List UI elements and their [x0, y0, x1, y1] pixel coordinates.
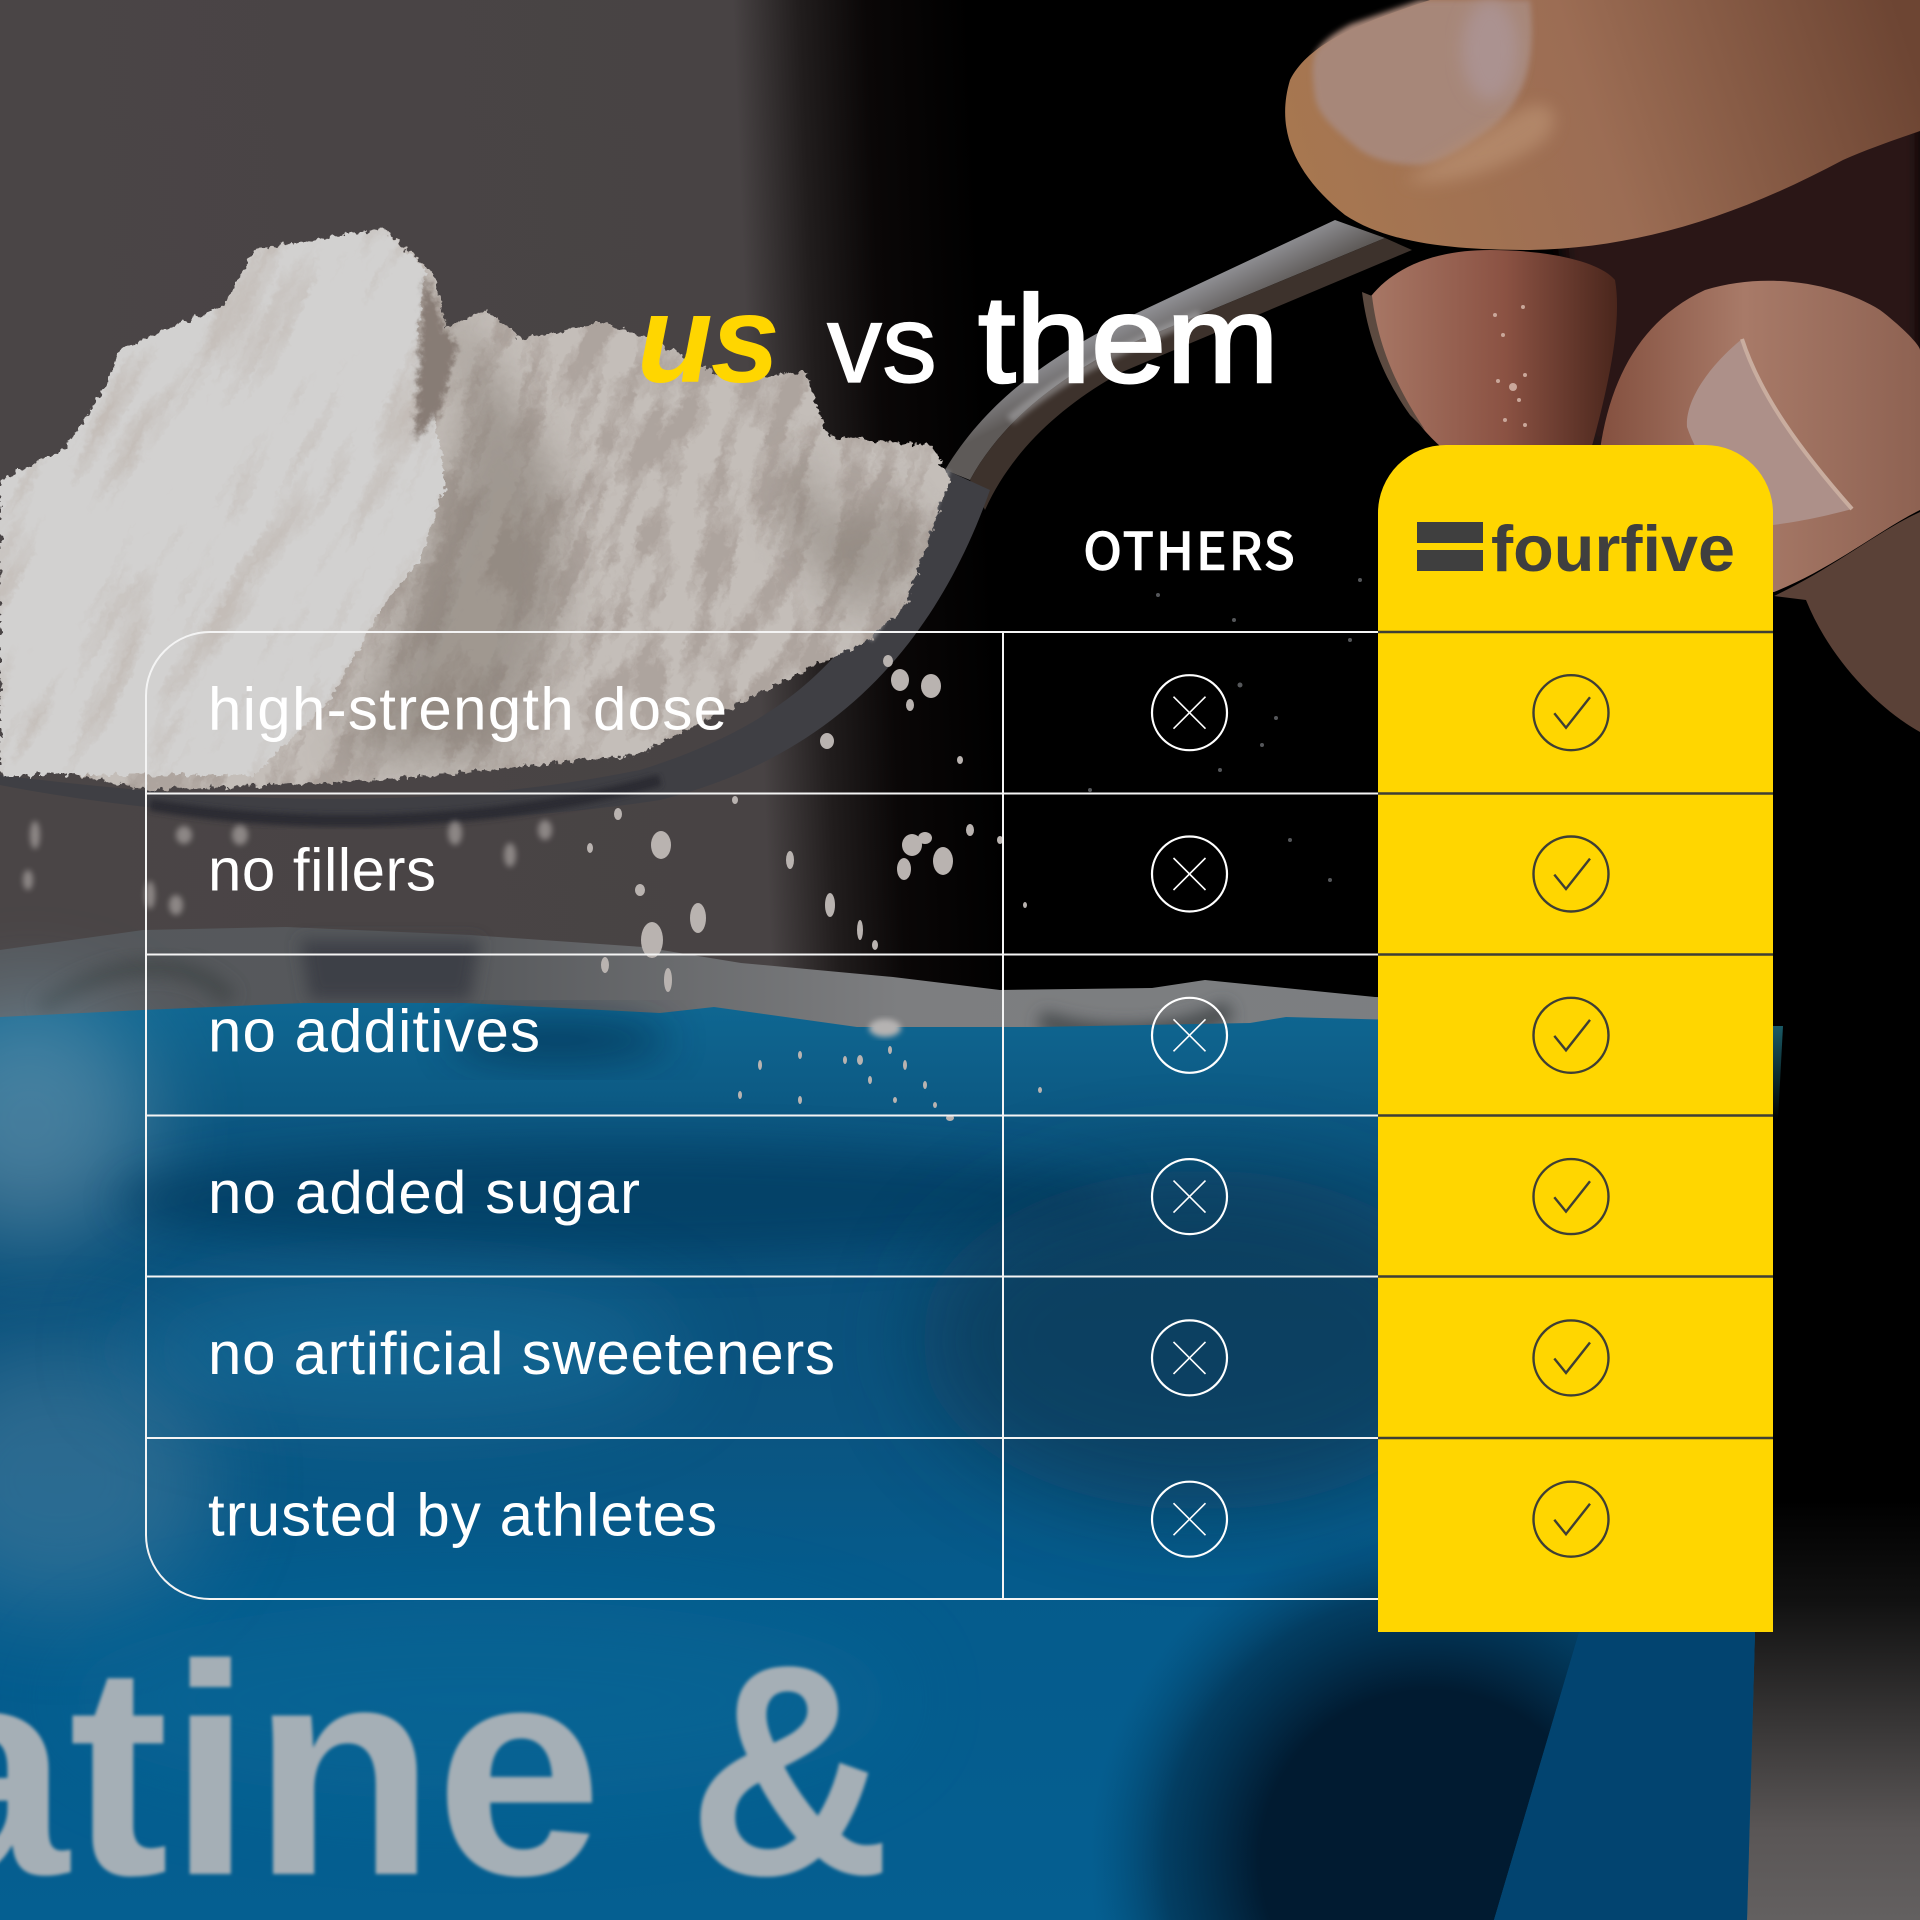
cross icon row 3	[1152, 998, 1227, 1073]
logo: fourfive: fourfive	[1491, 512, 1735, 585]
title word: them: them	[978, 271, 1279, 409]
label: no fillers: no fillers	[208, 836, 436, 904]
title	[637, 271, 1279, 409]
shaded cliff beside peak	[415, 275, 458, 440]
blue pouch	[0, 927, 1783, 1920]
thumb	[1285, 0, 1920, 250]
label: no artificial sweeteners: no artificial sweeteners	[208, 1320, 835, 1387]
hand holding spoon	[1285, 0, 1920, 732]
header: others: OTHERS	[1083, 510, 1295, 585]
check icon row 3	[1534, 998, 1608, 1073]
pouch body	[0, 1003, 1770, 1920]
powder heap on spoon	[0, 0, 1607, 1273]
check icon row 2	[1534, 836, 1608, 912]
spoon handle	[945, 220, 1412, 510]
check icon row 4	[1534, 1159, 1608, 1234]
pouch edge fading to black	[1770, 1026, 1783, 1120]
comparison table	[146, 445, 1773, 1632]
powder specks on finger	[1493, 305, 1527, 427]
ring finger with nail	[1600, 281, 1920, 592]
cross icon row 1	[1152, 675, 1227, 750]
fine dust on dark background	[1088, 578, 1362, 882]
powder body	[0, 228, 951, 792]
check icon row 5	[1534, 1320, 1608, 1395]
check icon row 6	[1534, 1482, 1608, 1557]
falling powder particles	[23, 655, 1042, 1121]
title word: us: us	[637, 271, 778, 409]
yellow column divider lines	[1378, 632, 1773, 1438]
label: no additives: no additives	[208, 998, 540, 1064]
label: trusted by athletes: trusted by athletes	[208, 1482, 717, 1548]
others column cross icons	[1152, 675, 1227, 1557]
silver pouch rim	[0, 927, 1500, 1060]
cross icon row 4	[1152, 1159, 1227, 1234]
cross icon row 6	[1152, 1482, 1227, 1557]
cross icon row 2	[1152, 836, 1227, 912]
fourfive column check icons	[1534, 675, 1608, 1557]
thumb nail	[1313, 0, 1532, 165]
powder burst on pouch rim	[869, 1019, 901, 1037]
label: high-strength dose: high-strength dose	[208, 676, 727, 742]
label: no added sugar: no added sugar	[208, 1159, 640, 1226]
pouch printed text	[0, 1602, 891, 1920]
check icon row 1	[1534, 675, 1608, 750]
row labels	[208, 676, 835, 1548]
lower right grey corner	[1700, 1500, 1920, 1920]
shadow between fingers	[1560, 100, 1920, 470]
lower palm	[1774, 512, 1920, 732]
pouch shading	[0, 1000, 1755, 1920]
yellow fourfive column	[1378, 445, 1773, 1632]
title word: vs: vs	[827, 283, 937, 406]
cross icon row 5	[1152, 1320, 1227, 1395]
spoon bowl rim	[0, 465, 990, 820]
dark pouch fold	[1040, 1500, 1620, 1920]
middle finger	[1362, 250, 1617, 446]
table grid lines	[146, 632, 1378, 1599]
